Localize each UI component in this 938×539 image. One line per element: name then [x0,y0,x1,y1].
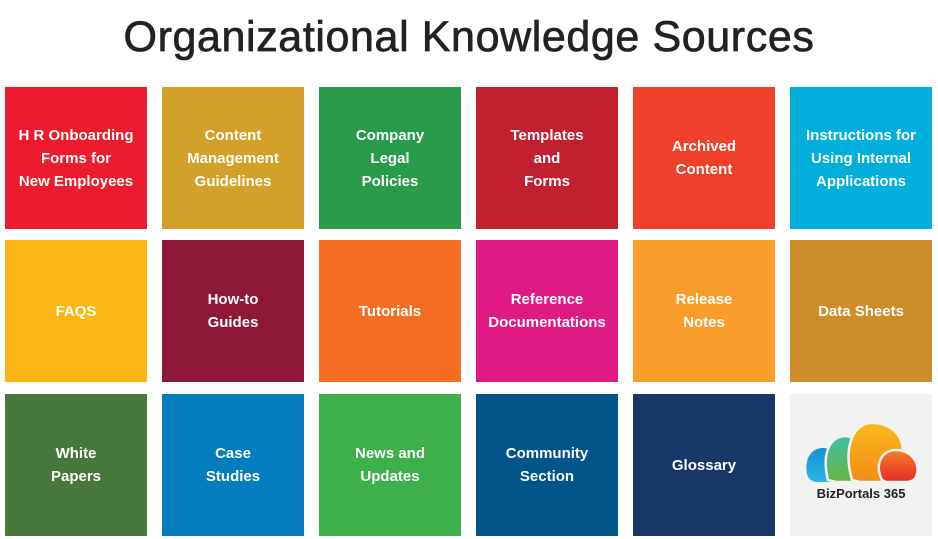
tile: legal policies: Legal [370,150,410,166]
tile: templates: and [534,150,560,166]
title: Organizational Knowledge Sources [124,13,814,61]
tile: FAQS [5,240,147,382]
tile: reference [476,240,618,382]
tile: how-to: How-to [208,291,258,308]
tile: white papers: Papers [51,468,101,485]
tile: news: News and [355,445,425,462]
tile: case studies: Studies [206,468,260,485]
tile: HR onboarding: Forms for [41,150,111,166]
tile: content management: Content [205,126,261,144]
tile: community: Section [520,468,574,485]
tile: FAQS: FAQS [56,302,96,320]
tile: news [319,394,461,536]
tile: legal policies: Policies [362,172,418,190]
tile: content management: Management [187,150,279,166]
tile: archived [633,87,775,229]
tile: logo [790,394,932,536]
tile: instructions [790,87,932,229]
tile: news: Updates [360,468,420,485]
tile: archived: Archived [672,138,736,155]
tile: templates: Forms [524,172,570,190]
tile: legal policies: Company [356,126,424,144]
logo: cloud [806,423,918,482]
tile: how-to [162,240,304,382]
tile: release notes: Release [676,291,732,308]
tile: release notes: Notes [683,314,725,331]
tile: HR onboarding: H R Onboarding [18,126,134,144]
tile: reference: Documentations [488,314,606,331]
tile: instructions: Using Internal [811,150,911,166]
logo text: BizPortals 365 [817,486,905,501]
tile: legal policies [319,87,461,229]
tile: HR onboarding: New Employees [19,172,133,190]
tile: instructions: Instructions for [806,126,916,144]
tile: content management: Guidelines [195,172,271,190]
tile: reference: Reference [511,291,583,308]
tile: data sheets [790,240,932,382]
tile: archived: Content [676,161,732,178]
tile: tutorials [319,240,461,382]
tile: glossary [633,394,775,536]
tile: case studies: Case [215,445,251,462]
tile: white papers [5,394,147,536]
tile: community [476,394,618,536]
tile: glossary: Glossary [672,456,736,474]
tile: release notes [633,240,775,382]
tile: data sheets: Data Sheets [818,302,904,320]
tile: community: Community [506,445,588,462]
tile: white papers: White [56,445,96,462]
tile: instructions: Applications [816,172,906,190]
tile: case studies [162,394,304,536]
tile: content management [162,87,304,229]
tile: tutorials: Tutorials [359,302,421,320]
tile: HR onboarding [5,87,147,229]
tile: templates [476,87,618,229]
tile: templates: Templates [510,126,584,144]
tile: how-to: Guides [208,314,258,331]
